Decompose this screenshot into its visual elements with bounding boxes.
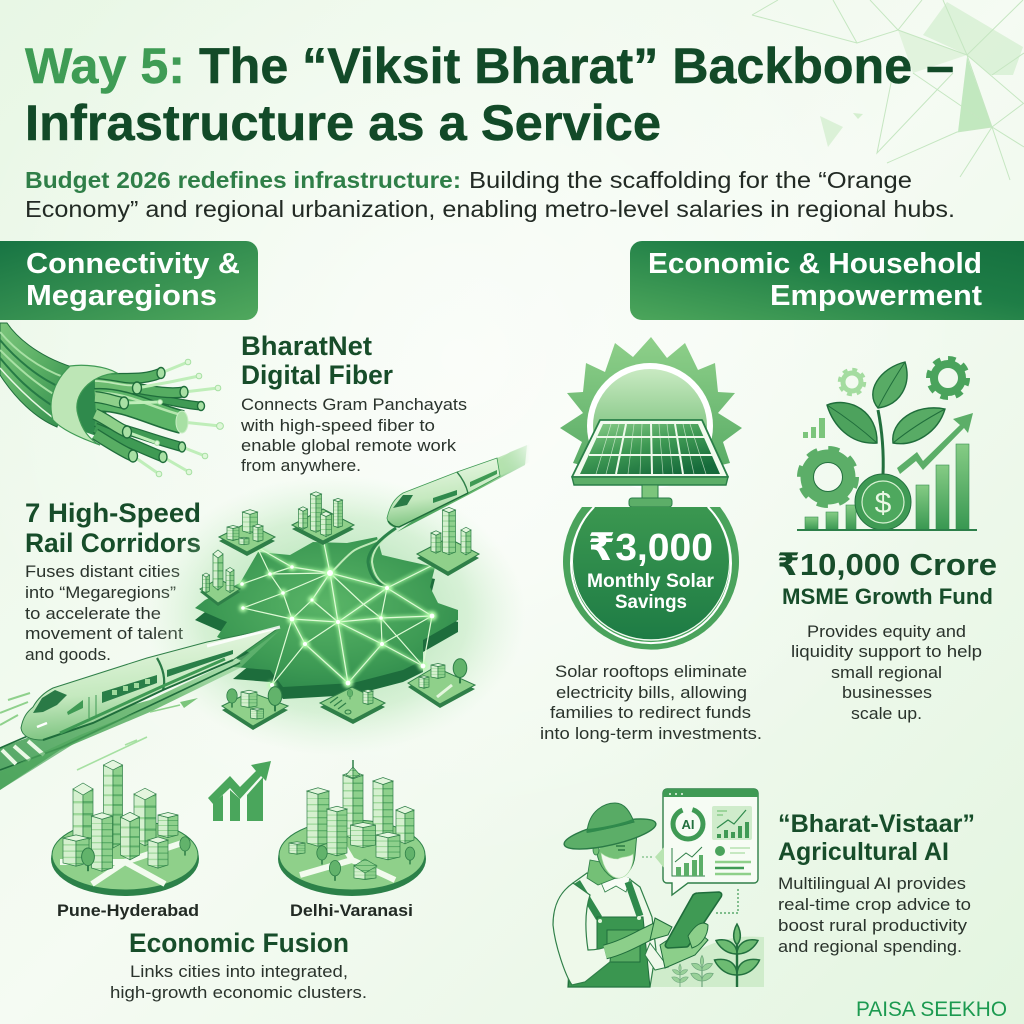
- text block: 7 High-Speed Rail Corridors: to accelerate the: [25, 604, 161, 623]
- icon: city tile north-east: [417, 507, 479, 576]
- text block: solar description: [540, 662, 762, 743]
- text block: city labels and Economic Fusion: Pune-Hyderabad: [57, 902, 199, 920]
- title: Way 5:: [25, 38, 185, 94]
- icon: growth arrow chart: [208, 761, 271, 821]
- subtitle: Budget 2026 redefines infrastructure:: [25, 167, 461, 193]
- text block: solar description: electricity bills, allowing: [556, 683, 747, 702]
- text block: BharatNet Digital Fiber: with high-speed fiber to: [240, 416, 435, 435]
- badge: ₹3,000 monthly solar savings: Monthly Solar: [587, 571, 715, 592]
- icon: city tile north: [292, 492, 354, 545]
- text block: Bharat-Vistaar Agricultural AI: real-time crop advice to: [778, 895, 971, 914]
- text block: 7 High-Speed Rail Corridors: into “Megaregions”: [25, 583, 176, 602]
- map: glowing megaregion network: [145, 475, 525, 755]
- text block: BharatNet Digital Fiber: from anywhere.: [241, 456, 361, 475]
- text block: MSME Growth Fund: [777, 547, 997, 723]
- icon: farmer with tablet and AI panel: [553, 789, 764, 987]
- title: The “Viksit Bharat” Backbone –: [199, 38, 954, 94]
- farmer figure: [553, 803, 722, 987]
- AI dashboard panel: [642, 789, 758, 913]
- text block: city labels and Economic Fusion: Links cities into integrated,: [130, 962, 348, 981]
- text block: BharatNet Digital Fiber: Connects Gram Panchayats: [241, 395, 467, 414]
- icon: MSME growth plant, gears, coin and bars: [797, 358, 977, 531]
- text block: BharatNet Digital Fiber: enable global remote work: [241, 436, 457, 455]
- glass fibers and tips: [120, 359, 223, 477]
- text block: MSME Growth Fund: MSME Growth Fund: [782, 584, 993, 609]
- subtitle: [25, 167, 955, 222]
- text block: Bharat-Vistaar Agricultural AI: Multilingual AI provides: [778, 874, 966, 893]
- text block: city labels and Economic Fusion: Economic Fusion: [129, 928, 349, 958]
- text block: city labels and Economic Fusion: Delhi-Varanasi: [290, 902, 413, 920]
- AI dashboard panel: AI: [682, 817, 694, 832]
- text block: MSME Growth Fund: liquidity support to help: [791, 642, 982, 661]
- badge: ₹3,000 monthly solar savings: [563, 507, 739, 650]
- icon: farm tile south: [320, 687, 385, 724]
- banner: Connectivity & Megaregions: [0, 241, 258, 320]
- logo: PAISA SEEKHO: PAISA SEEKHO: [856, 998, 1007, 1021]
- banner: Economic & Household Empowerment: [630, 241, 1024, 320]
- text block: city labels and Economic Fusion: [57, 902, 413, 1002]
- icon: lower bullet train and track: [0, 627, 280, 790]
- title: Infrastructure as a Service: [25, 95, 661, 151]
- banner: Connectivity & Megaregions: Megaregions: [26, 280, 217, 312]
- text block: Bharat-Vistaar Agricultural AI: and regional spending.: [778, 937, 962, 956]
- text block: MSME Growth Fund: businesses: [842, 683, 932, 702]
- text block: 7 High-Speed Rail Corridors: 7 High-Speed: [25, 498, 201, 528]
- text block: MSME Growth Fund: ₹10,000 Crore: [777, 547, 997, 582]
- text block: Bharat-Vistaar Agricultural AI: “Bharat-Vistaar”: [778, 810, 975, 838]
- title: [25, 38, 954, 151]
- banner: Economic & Household Empowerment: Economic & Household: [648, 248, 982, 280]
- text block: 7 High-Speed Rail Corridors: movement of talent: [25, 624, 183, 643]
- text block: BharatNet Digital Fiber: BharatNet: [241, 331, 372, 361]
- icon: village tile south-east: [408, 659, 475, 708]
- text block: Bharat-Vistaar Agricultural AI: boost rural productivity: [778, 916, 968, 935]
- icon: village tile south-west: [222, 687, 288, 730]
- banner: Connectivity & Megaregions: Connectivity &: [26, 248, 240, 280]
- icon: fiber optic cable: [0, 323, 223, 477]
- icon: MSME growth plant, gears, coin and bars: $: [875, 487, 892, 520]
- subtitle: Economy” and regional urbanization, enabling metro-level salaries in regional hubs.: [25, 196, 955, 222]
- banner: Economic & Household Empowerment: Empowerment: [770, 280, 982, 312]
- text block: 7 High-Speed Rail Corridors: Rail Corridors: [25, 528, 201, 558]
- badge: ₹3,000 monthly solar savings: Savings: [615, 592, 687, 613]
- subtitle: Building the scaffolding for the “Orange: [469, 167, 912, 193]
- text block: Bharat-Vistaar Agricultural AI: [778, 810, 975, 956]
- text block: BharatNet Digital Fiber: [240, 331, 467, 475]
- text block: solar description: into long-term investments.: [540, 724, 762, 743]
- icon: Pune-Hyderabad city disc: [51, 760, 199, 896]
- icon: city tile north-west: [219, 510, 275, 556]
- text block: 7 High-Speed Rail Corridors: [25, 498, 201, 664]
- icon: Delhi-Varanasi city disc: [278, 760, 426, 896]
- icon: solar panel with sun: [560, 337, 742, 507]
- text block: BharatNet Digital Fiber: Digital Fiber: [241, 360, 393, 390]
- text block: 7 High-Speed Rail Corridors: Fuses distant cities: [25, 562, 180, 581]
- decoration: low-poly network top right: [752, 0, 1024, 180]
- badge: ₹3,000 monthly solar savings: ₹3,000: [588, 527, 713, 569]
- text block: MSME Growth Fund: small regional: [831, 663, 942, 682]
- text block: MSME Growth Fund: Provides equity and: [807, 622, 966, 641]
- back strands: [95, 373, 201, 457]
- text block: city labels and Economic Fusion: high-growth economic clusters.: [110, 983, 367, 1002]
- text block: 7 High-Speed Rail Corridors: and goods.: [25, 645, 111, 664]
- text block: solar description: Solar rooftops eliminate: [555, 662, 747, 681]
- text block: solar description: families to redirect funds: [550, 703, 751, 722]
- ground and crops: [650, 924, 764, 987]
- icon: upper bullet train: [387, 444, 530, 532]
- icon: city tile west: [200, 550, 240, 606]
- text block: MSME Growth Fund: scale up.: [851, 704, 922, 723]
- text block: Bharat-Vistaar Agricultural AI: Agricultural AI: [778, 838, 949, 866]
